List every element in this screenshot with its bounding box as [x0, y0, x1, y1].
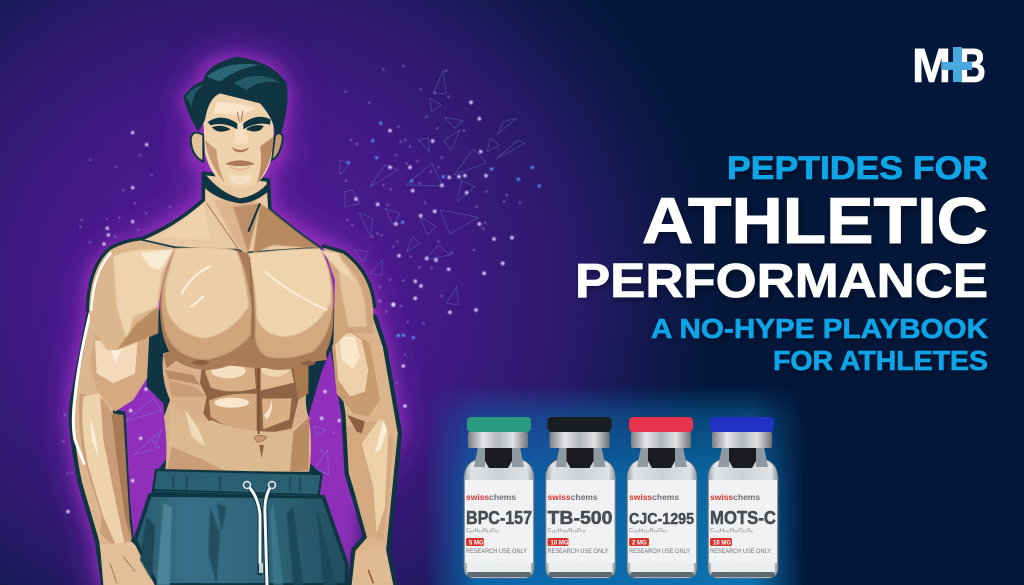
vial: MOTS-C: 10 MG — [713, 540, 731, 546]
vial: TB-500: TB-500 — [548, 508, 612, 528]
face — [203, 87, 274, 187]
left pectoral — [160, 248, 254, 370]
particle field: dots and triangles — [340, 66, 539, 338]
torso and abdominal muscles — [147, 310, 337, 473]
vial: TB-500: RESEARCH USE ONLY — [548, 548, 609, 555]
logo: M+B: B — [959, 40, 986, 93]
logo: M+B: M — [912, 40, 951, 93]
vial: CJC-1295: RESEARCH USE ONLY — [629, 548, 691, 555]
shorts — [135, 495, 347, 585]
ab shadow mass — [200, 356, 298, 435]
subtitle line: A NO-HYPE PLAYBOOK: A NO-HYPE PLAYBOOK — [651, 313, 988, 344]
cap: black — [548, 417, 612, 432]
title line: PEPTIDES FOR: PEPTIDES FOR — [727, 150, 988, 186]
title line: PERFORMANCE: PERFORMANCE — [575, 255, 988, 308]
ears — [191, 133, 203, 162]
chest base — [170, 248, 327, 368]
vial: BPC-157: 5 MG — [469, 540, 484, 546]
right pectoral — [248, 248, 334, 370]
vial glow panel — [425, 385, 805, 585]
title line: ATHLETIC: ATHLETIC — [642, 184, 988, 257]
title — [575, 150, 988, 376]
navel — [254, 435, 267, 442]
vial: BPC-157: BPC-157 — [466, 508, 532, 528]
head — [183, 57, 288, 187]
vial: CJC-1295: 2 MG — [632, 540, 647, 546]
subtitle line: FOR ATHLETES: FOR ATHLETES — [773, 345, 988, 376]
right shoulder outline — [323, 246, 375, 307]
centre line — [256, 343, 262, 434]
vial: TB-500 — [546, 417, 616, 578]
ab 2 left — [209, 394, 257, 431]
ab 1 left — [205, 361, 256, 391]
left arm — [71, 297, 157, 585]
vial: BPC-157 — [464, 417, 534, 578]
side obliques — [293, 363, 308, 400]
vial: TB-500: C₂₁₂H₃₅₀N₅₆O₇₈ — [548, 528, 585, 534]
vial: MOTS-C: RESEARCH USE ONLY — [710, 548, 772, 555]
vial: MOTS-C: C₁₀₁H₁₅₂N₂₈O₂₂S₂ — [710, 528, 753, 534]
right hand — [352, 545, 393, 585]
logo: M+B — [912, 40, 986, 93]
ab 1 right — [261, 359, 294, 391]
vial: MOTS-C: swisschems — [710, 492, 760, 502]
vial: MOTS-C — [708, 417, 778, 578]
neck — [138, 173, 320, 253]
left shoulder outline — [87, 239, 139, 310]
vial: BPC-157: RESEARCH USE ONLY — [466, 548, 528, 555]
vial: CJC-1295: CJC-1295 — [629, 511, 694, 528]
particle field: lower side gaps — [63, 302, 405, 512]
right arm — [332, 313, 400, 585]
cap: blue — [710, 417, 774, 432]
abs base — [162, 330, 311, 472]
shorts waistband — [153, 470, 322, 497]
vial: MOTS-C: MOTS-C — [710, 508, 776, 528]
hair — [183, 57, 288, 135]
rib band and serratus — [170, 333, 257, 367]
vial: TB-500: swisschems — [548, 492, 598, 502]
vial: BPC-157: C₆₂H₉₈N₁₆O₂₂ — [466, 528, 499, 534]
cap: green — [467, 417, 531, 432]
lats — [147, 310, 337, 473]
vial: BPC-157: swisschems — [466, 492, 516, 502]
eyes — [212, 126, 231, 132]
arms — [71, 297, 400, 585]
right deltoid — [323, 247, 373, 347]
glow: purple halo around athlete — [70, 57, 400, 585]
shoulders, neck and chest — [87, 172, 375, 370]
ab 2 right — [262, 398, 292, 429]
left hand — [100, 542, 155, 585]
vial: TB-500: 10 MG — [550, 540, 569, 546]
vial: CJC-1295 — [627, 417, 697, 578]
drawstring — [244, 482, 276, 585]
vial: CJC-1295: swisschems — [629, 492, 679, 502]
lower abdomen — [167, 403, 308, 472]
left deltoid — [88, 240, 175, 350]
athlete illustration — [71, 57, 400, 585]
eyebrows — [208, 118, 237, 129]
particle field: left of athlete — [81, 133, 170, 244]
cap: red — [629, 417, 693, 432]
vial: CJC-1295: C₁₅₂H₂₅₂N₄₄O₄₂ — [629, 528, 667, 534]
